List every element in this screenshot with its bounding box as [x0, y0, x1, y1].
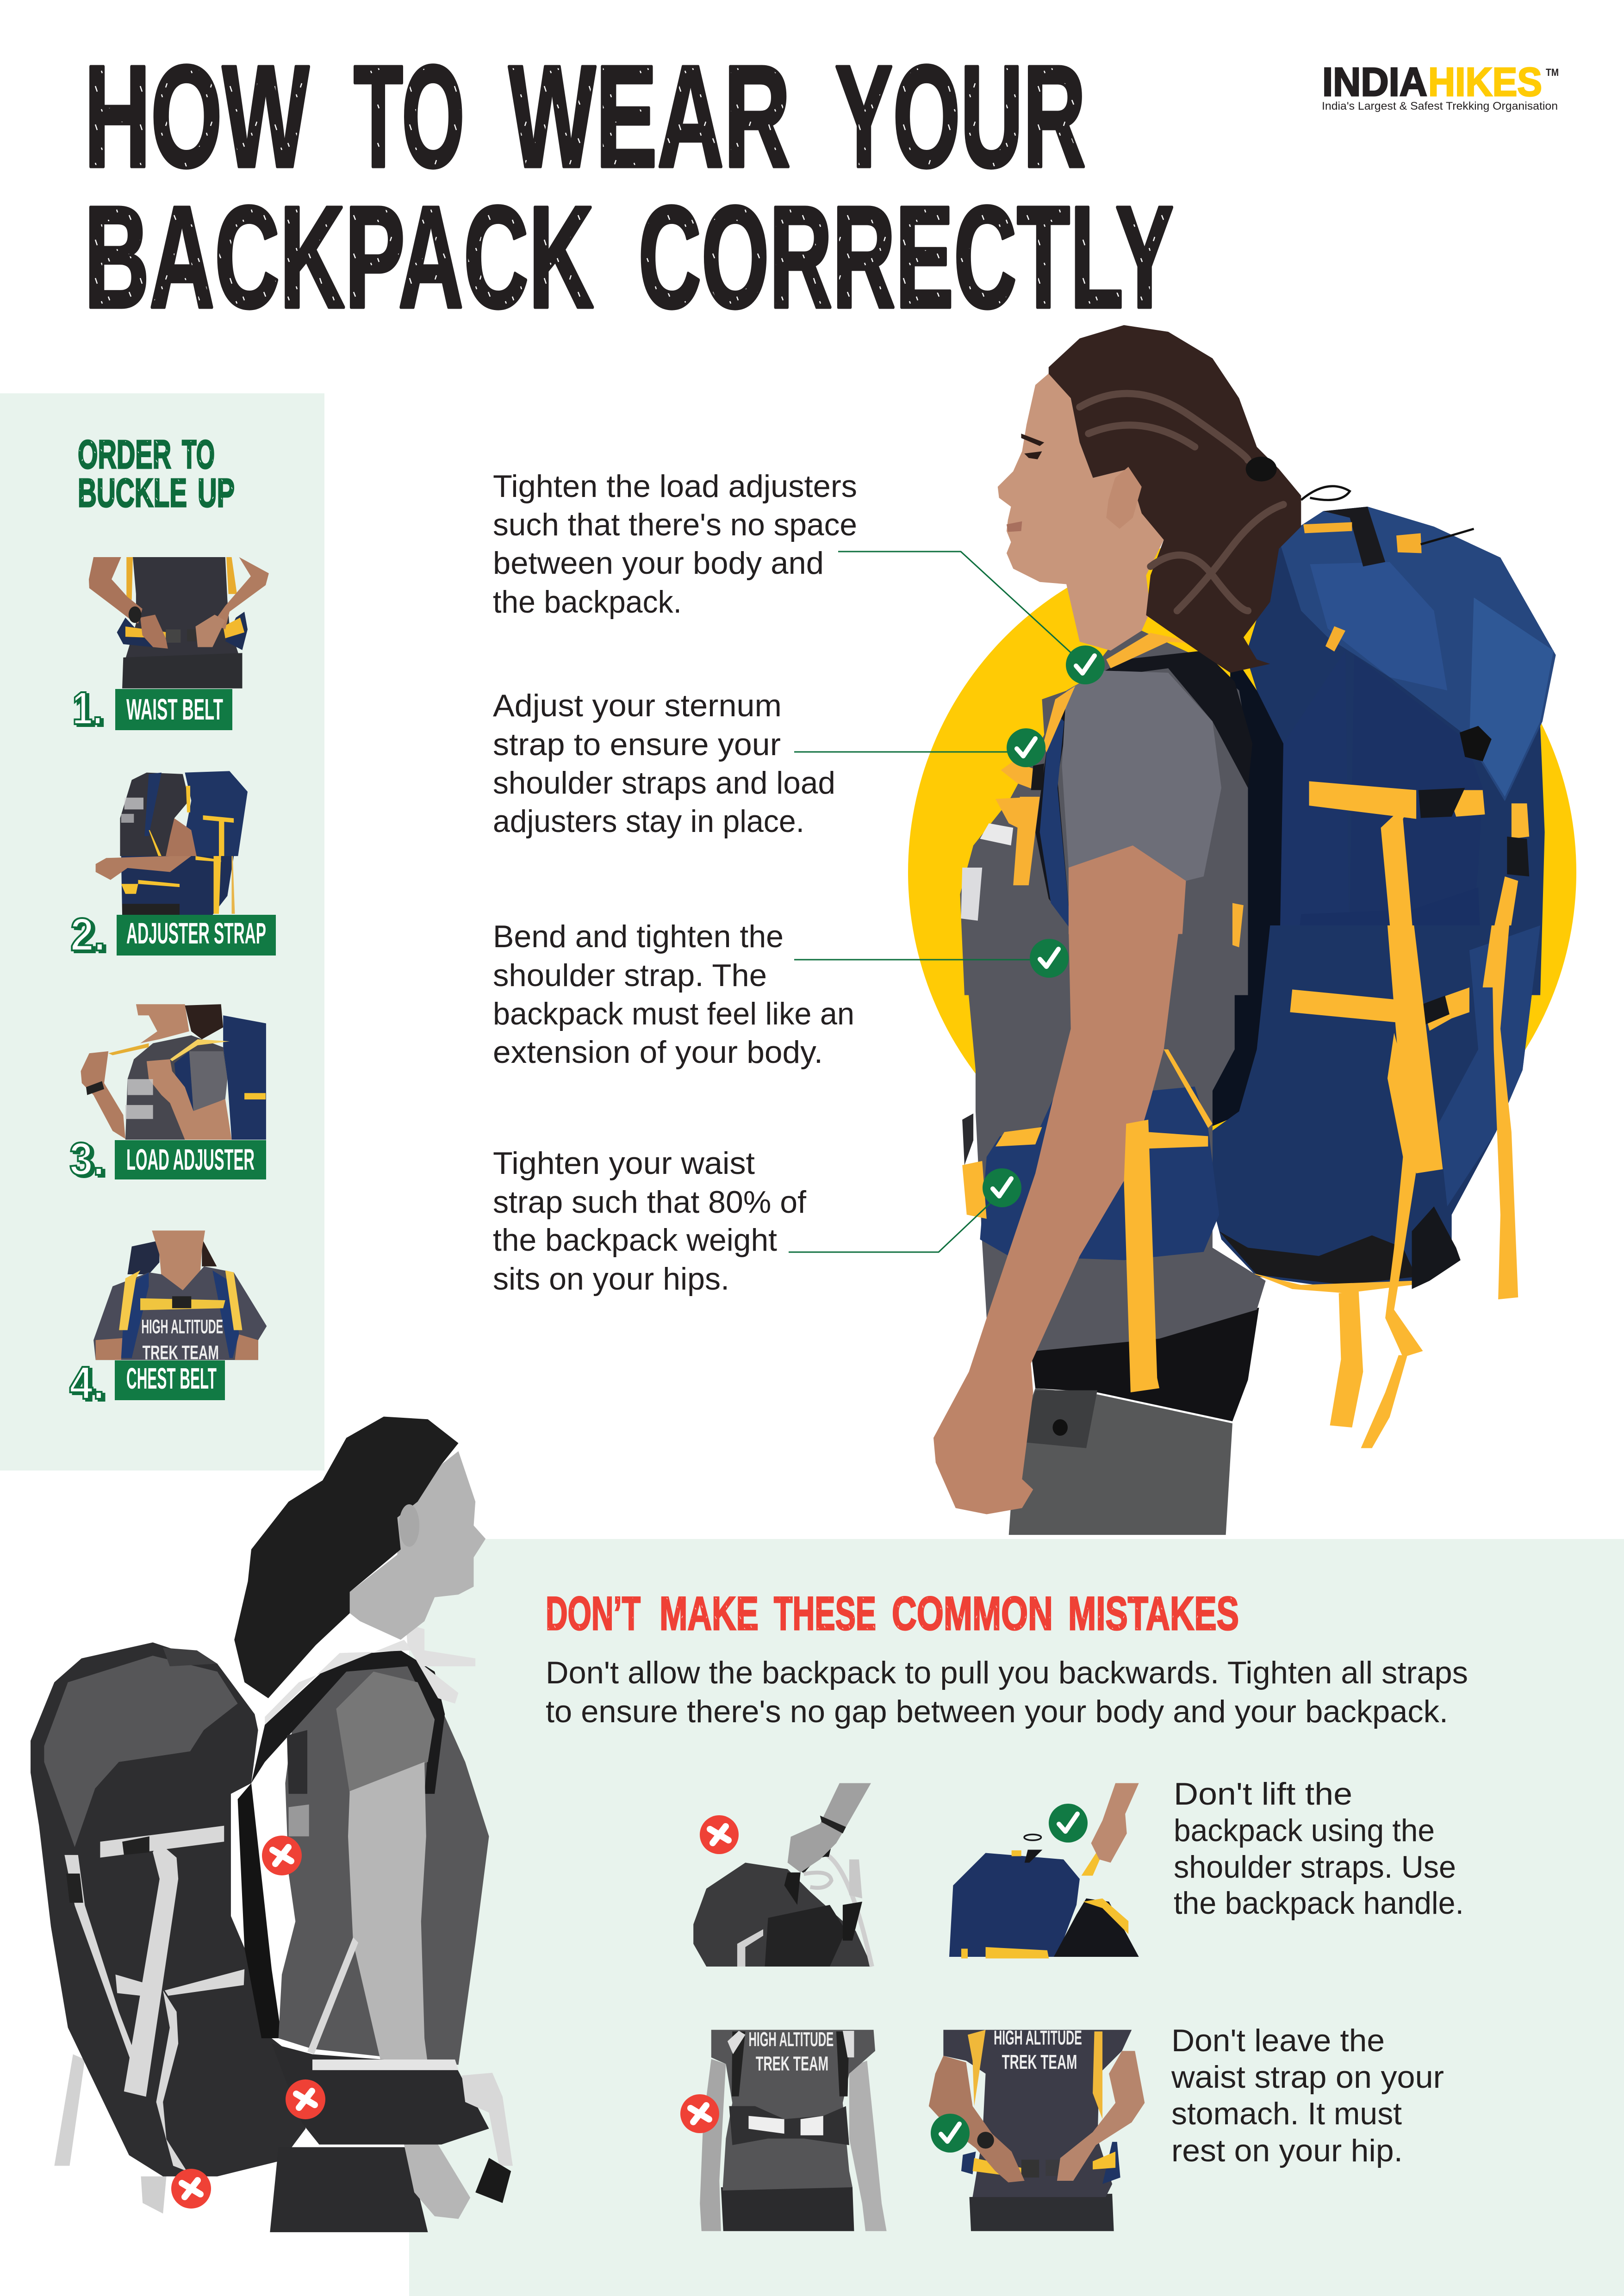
text block: don't lift	[1174, 1776, 1464, 1921]
logo: Indiahikes: India's Largest & Safest Trekking Organisation	[1322, 100, 1558, 112]
label: step 3 load adjuster	[115, 1140, 266, 1179]
text block: shoulder strap	[493, 919, 854, 1070]
text block: load adjusters: between your body and	[493, 546, 824, 581]
label: step 2 adjuster strap: ADJUSTER STRAP	[126, 917, 266, 950]
icon: check 4	[983, 1168, 1021, 1207]
title: BACKPACK	[84, 176, 594, 338]
number: 1: 1.	[75, 684, 106, 736]
text block: don't leave waist strap: rest on your hip.	[1171, 2133, 1403, 2168]
text block: waist strap: the backpack weight	[493, 1222, 777, 1258]
logo: Indiahikes: TM	[1546, 67, 1559, 78]
text block: don't leave waist strap: waist strap on your	[1171, 2060, 1444, 2095]
heading: order to buckle up: BUCKLE	[78, 471, 187, 515]
photo: step 3 load adjuster	[81, 1004, 266, 1140]
icon: cross for stomach strap	[680, 2094, 719, 2133]
logo: Indiahikes	[1322, 60, 1559, 112]
text block: don't lift: Don't lift the	[1174, 1776, 1352, 1812]
label: step 4 chest belt	[115, 1360, 225, 1400]
icon: check 1	[1066, 645, 1105, 684]
text block: waist strap	[493, 1146, 806, 1297]
photo: waist strap on hip (right): HIGH ALTITUDE	[994, 2027, 1082, 2049]
text block: shoulder strap: backpack must feel like an	[493, 996, 854, 1031]
icon: cross on back gap	[262, 1836, 302, 1875]
text block: don't lift: the backpack handle.	[1174, 1886, 1464, 1921]
title: TO	[354, 35, 465, 198]
head and hair	[998, 325, 1301, 673]
number: 4: 4.	[72, 1359, 107, 1411]
text block: load adjusters: Tighten the load adjusters	[493, 469, 857, 504]
photo: step 4 chest belt: HIGH ALTITUDE	[141, 1316, 223, 1338]
photo: step 2 adjuster strap	[96, 771, 248, 915]
text block: load adjusters	[493, 469, 857, 620]
title	[84, 35, 1174, 338]
heading: order to buckle up	[78, 432, 235, 515]
grayscale figure: woman with loose backpack	[31, 1416, 513, 2232]
number: 3: 3.	[69, 1133, 105, 1185]
text block: mistakes intro: to ensure there's no gap between your body and your backpack.	[546, 1694, 1448, 1729]
heading: don't make these common mistakes: MISTAKES	[1068, 1587, 1239, 1640]
icon: cross for lifting	[700, 1815, 739, 1854]
label: step 2 adjuster strap	[117, 915, 276, 956]
text block: mistakes intro: Don't allow the backpack to pull you backwards. Tighten all straps	[546, 1655, 1468, 1690]
photo: lifting by shoulder straps (wrong)	[693, 1783, 872, 1967]
heading: order to buckle up: TO	[182, 432, 215, 477]
label: step 3 load adjuster: LOAD ADJUSTER	[126, 1143, 255, 1176]
logo: Indiahikes: INDIA	[1322, 60, 1427, 105]
text block: shoulder strap: shoulder strap. The	[493, 958, 767, 993]
number: 2: 2.	[70, 909, 106, 961]
icon: cross on hip	[286, 2079, 325, 2119]
text block: sternum strap	[493, 688, 835, 839]
icon: check for hip strap	[931, 2114, 970, 2153]
heading: don't make these common mistakes	[546, 1587, 1239, 1640]
callout line: shoulder strap	[794, 959, 1037, 961]
number: 4: 4.	[69, 1357, 105, 1409]
label: step 4 chest belt: CHEST BELT	[126, 1362, 217, 1395]
backpack: lower	[1208, 925, 1540, 1448]
head and hair	[234, 1416, 485, 1698]
text block: mistakes intro	[546, 1655, 1468, 1729]
title: HOW	[84, 35, 310, 198]
photo: waist strap on hip (right): TREK TEAM	[1002, 2051, 1077, 2073]
backpack: upper	[1226, 486, 1556, 995]
text block: shoulder strap: extension of your body.	[493, 1035, 823, 1070]
text block: sternum strap: adjusters stay in place.	[493, 804, 804, 839]
photo: waist strap on stomach (wrong)	[700, 2029, 887, 2231]
heading: don't make these common mistakes: COMMON	[892, 1587, 1053, 1640]
text block: don't lift: shoulder straps. Use	[1174, 1849, 1456, 1885]
text block: waist strap: strap such that 80% of	[493, 1185, 806, 1220]
heading: don't make these common mistakes: MAKE	[660, 1587, 759, 1640]
waist pack	[962, 1049, 1219, 1260]
icon: cross on backpack bottom	[171, 2169, 211, 2209]
text block: waist strap: sits on your hips.	[493, 1261, 729, 1297]
trailing strap and arm	[933, 845, 1219, 1514]
yellow circle behind figure	[908, 538, 1576, 1206]
photo: step 4 chest belt: TREK TEAM	[143, 1342, 219, 1364]
photo: waist strap on hip (right)	[929, 2027, 1145, 2231]
shirt and trousers	[962, 925, 1266, 1535]
label: step 1 waist belt	[115, 689, 232, 730]
callout line: waist strap	[789, 1203, 990, 1252]
number: 1: 1.	[72, 683, 103, 734]
text block: load adjusters: such that there's no space	[493, 507, 857, 542]
title: CORRECTLY	[638, 176, 1174, 338]
torso	[251, 1624, 513, 2232]
text block: sternum strap: shoulder straps and load	[493, 765, 835, 800]
callout line: load adjusters	[838, 552, 1075, 656]
icon: check for handle	[1049, 1804, 1088, 1843]
main figure: woman wearing backpack	[933, 325, 1556, 1535]
heading: don't make these common mistakes: THESE	[774, 1587, 876, 1640]
photo: lifting by handle (right)	[949, 1783, 1139, 1958]
text block: don't leave waist strap	[1171, 2023, 1444, 2168]
icon: check 3	[1030, 939, 1069, 978]
photo: waist strap on stomach (wrong): TREK TEAM	[756, 2053, 828, 2075]
label: step 1 waist belt: WAIST BELT	[126, 693, 223, 726]
text block: don't lift: backpack using the	[1174, 1813, 1435, 1848]
text block: sternum strap: Adjust your sternum	[493, 688, 782, 723]
text block: don't leave waist strap: stomach. It must	[1171, 2096, 1402, 2131]
panel: common mistakes background	[409, 1539, 1624, 2296]
title: YOUR	[835, 35, 1086, 198]
text block: don't leave waist strap: Don't leave the	[1171, 2023, 1385, 2058]
photo: step 4 chest belt	[93, 1230, 267, 1364]
heading: order to buckle up: UP	[198, 471, 235, 515]
number: 3: 3.	[72, 1135, 107, 1187]
photo: waist strap on stomach (wrong): HIGH ALTITUDE	[748, 2029, 834, 2051]
logo: Indiahikes: HIKES	[1428, 60, 1542, 105]
text block: sternum strap: strap to ensure your	[493, 727, 781, 762]
heading: don't make these common mistakes: DON’T	[546, 1587, 641, 1640]
heading: order to buckle up: ORDER	[78, 432, 171, 477]
photo: step 1 waist belt	[89, 557, 269, 689]
text block: waist strap: Tighten your waist	[493, 1146, 755, 1181]
text block: shoulder strap: Bend and tighten the	[493, 919, 784, 954]
number: 2: 2.	[73, 911, 108, 962]
callout line: sternum strap	[794, 751, 1014, 752]
icon: check 2	[1007, 728, 1045, 767]
backpack	[31, 1643, 305, 2214]
title: WEAR	[509, 35, 790, 198]
panel: order to buckle up background	[0, 393, 324, 1471]
text block: load adjusters: the backpack.	[493, 584, 682, 620]
